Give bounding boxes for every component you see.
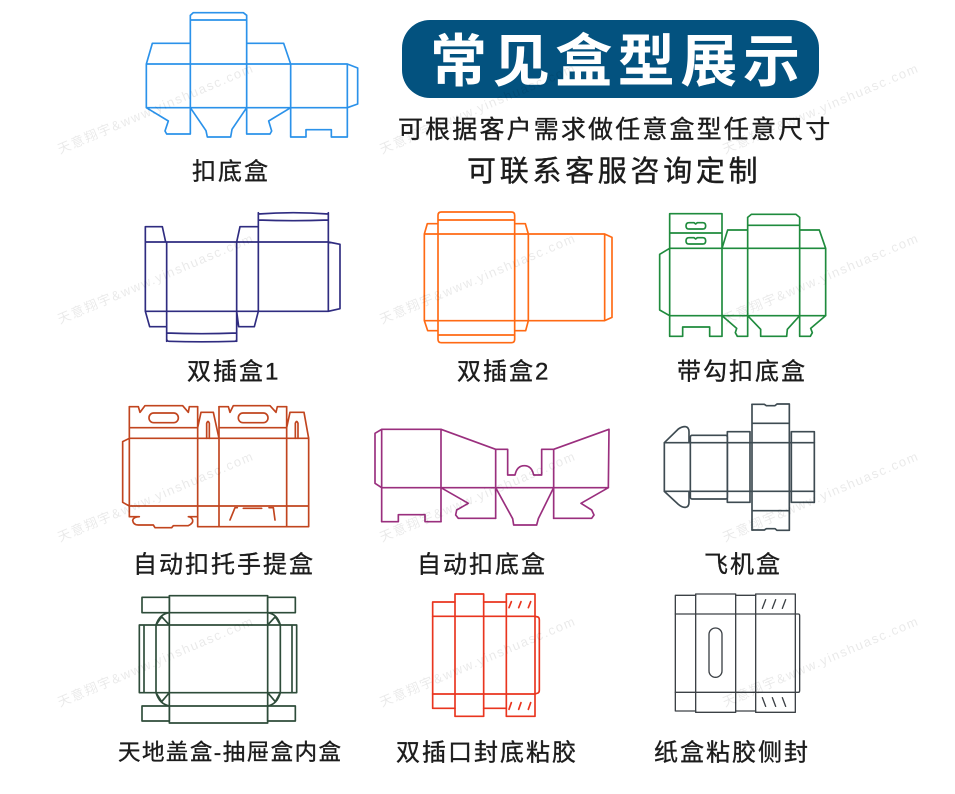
watermark grid: 天意翔宇&www.yinshuasc.com	[377, 230, 578, 327]
watermark grid: 天意翔宇&www.yinshuasc.com	[55, 613, 256, 710]
watermark grid: 天意翔宇&www.yinshuasc.com	[55, 448, 256, 545]
watermark grid: 天意翔宇&www.yinshuasc.com	[377, 448, 578, 545]
watermark grid: 天意翔宇&www.yinshuasc.com	[720, 60, 921, 157]
diagram: paper box glued side seal, dark gray	[675, 594, 800, 712]
diagram: double-tuck glued-bottom box, red	[433, 594, 539, 716]
diagram: buckle-bottom box, blue	[146, 13, 358, 137]
watermark grid: 天意翔宇&www.yinshuasc.com	[720, 230, 921, 327]
watermark grid: 天意翔宇&www.yinshuasc.com	[720, 613, 921, 710]
watermark grid: 天意翔宇&www.yinshuasc.com	[377, 613, 578, 710]
subtitle line 2: 可联系客服咨询定制	[467, 155, 761, 188]
subtitle line 1: 可根据客户需求做任意盒型任意尺寸	[398, 116, 832, 144]
title: 常见盒型展示	[430, 30, 806, 94]
label: 扣底盒: 扣底盒	[192, 158, 270, 186]
label: 飞机盒: 飞机盒	[704, 552, 782, 578]
diagram: auto-lock handle box, rust	[123, 406, 309, 528]
pill: title banner	[402, 20, 819, 98]
label: 天地盖盒-抽屉盒内盒: 天地盖盒-抽屉盒内盒	[118, 740, 342, 765]
label: 自动扣托手提盒: 自动扣托手提盒	[133, 552, 315, 578]
label: 纸盒粘胶侧封: 纸盒粘胶侧封	[654, 740, 810, 766]
label: 带勾扣底盒: 带勾扣底盒	[677, 358, 807, 386]
diagram: hook buckle-bottom box, green	[660, 214, 826, 336]
watermark grid	[55, 60, 921, 710]
diagram: double-tuck box 1, navy	[145, 213, 340, 342]
watermark grid: 天意翔宇&www.yinshuasc.com	[55, 60, 256, 157]
label: 自动扣底盒: 自动扣底盒	[417, 552, 547, 578]
diagram: auto-lock bottom box, purple	[375, 429, 609, 525]
watermark grid: 天意翔宇&www.yinshuasc.com	[377, 60, 578, 157]
diagram: lid-and-base drawer box, dark green	[139, 596, 297, 723]
label: 双插口封底粘胶: 双插口封底粘胶	[396, 740, 578, 766]
watermark grid: 天意翔宇&www.yinshuasc.com	[720, 448, 921, 545]
label: 双插盒2: 双插盒2	[457, 358, 550, 386]
label: 双插盒1: 双插盒1	[187, 358, 280, 386]
watermark grid: 天意翔宇&www.yinshuasc.com	[55, 230, 256, 327]
diagram: airplane box, slate	[664, 404, 814, 530]
diagram: double-tuck box 2, orange	[424, 212, 612, 343]
